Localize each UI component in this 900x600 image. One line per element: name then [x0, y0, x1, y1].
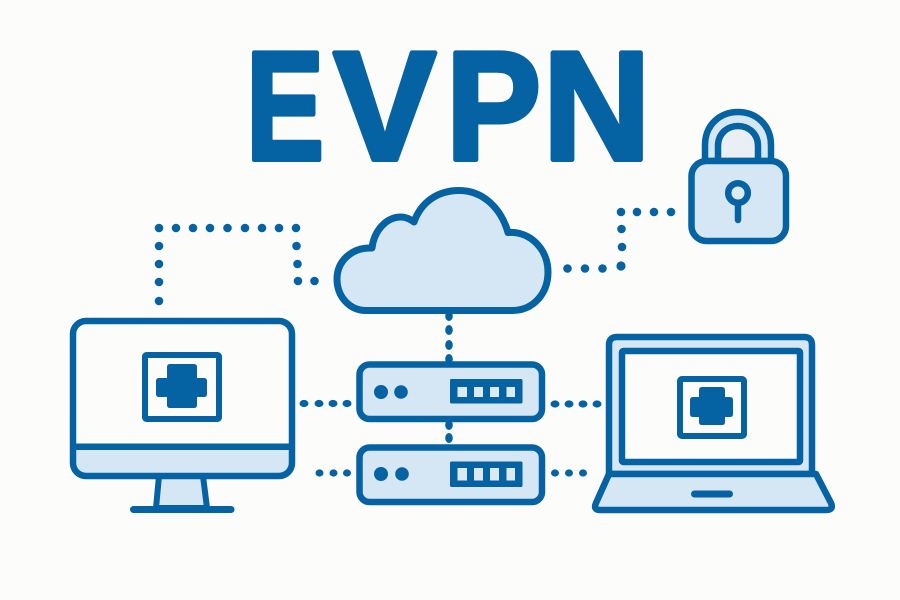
dotted link: monitor to cloud — [155, 224, 319, 305]
padlock shackle opening — [718, 126, 758, 161]
monitor frame — [73, 321, 292, 476]
padlock shackle — [705, 112, 771, 161]
padlock body — [692, 161, 786, 241]
monitor port square — [145, 355, 219, 419]
laptop lid — [609, 337, 812, 474]
icon: lower server — [360, 448, 542, 502]
dotted link: cloud to lock — [563, 208, 675, 273]
title: V — [334, 20, 436, 192]
title: P — [446, 20, 541, 192]
monitor divider — [73, 444, 292, 450]
icon: laptop — [595, 337, 832, 510]
monitor port cross — [156, 364, 207, 408]
laptop touchpad — [691, 490, 733, 498]
title: E — [246, 20, 324, 192]
dotted links: servers to laptop — [550, 400, 602, 477]
upper server LEDs — [374, 385, 408, 399]
lower server chassis — [360, 448, 542, 502]
laptop screen — [622, 351, 800, 462]
laptop port square — [680, 379, 744, 436]
icon: desktop monitor — [73, 321, 292, 513]
padlock keyhole — [728, 183, 748, 220]
monitor stand — [156, 476, 207, 508]
upper server chassis — [360, 364, 542, 419]
dotted link: cloud to servers — [445, 311, 453, 443]
title: N — [543, 20, 650, 192]
monitor stand base — [130, 506, 234, 513]
monitor chin — [73, 447, 292, 476]
laptop port cross — [690, 387, 733, 425]
upper server ports — [450, 379, 522, 404]
icon: upper server — [360, 364, 542, 419]
laptop base — [595, 474, 832, 510]
lower server LEDs — [374, 467, 409, 481]
icon: cloud — [337, 190, 548, 310]
dotted links: monitor to servers — [300, 400, 352, 477]
lower server ports — [450, 462, 522, 487]
icon: padlock — [692, 112, 786, 241]
